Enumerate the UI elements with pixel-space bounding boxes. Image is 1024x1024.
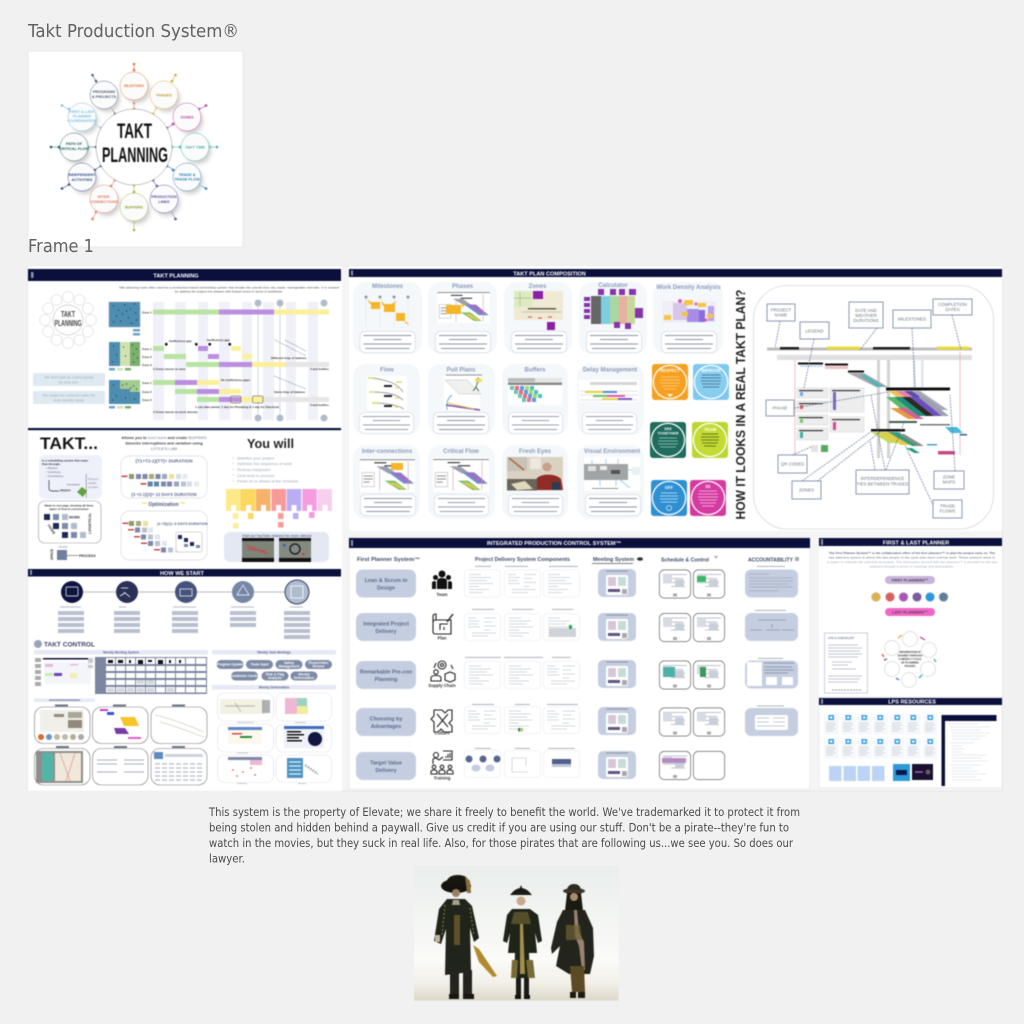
frame 1 board	[28, 266, 1002, 791]
hero card: takt planning wheel	[28, 51, 243, 247]
callout: date and weather durations: WEATHER	[855, 313, 877, 318]
gantt labels: Zone 2	[142, 355, 152, 359]
column headings: ACCOUNTABILITY	[748, 558, 794, 564]
card: three types of flow: Made in one page showing all three	[45, 504, 94, 508]
meeting chips: Program Update	[217, 663, 243, 667]
badge: 5s	[690, 480, 726, 516]
wheel nodes: COORDINATION	[67, 119, 97, 123]
colored takt blocks	[226, 489, 332, 528]
panel: takt plan composition	[349, 266, 1002, 531]
first and last description: to paper to maintain the schedule accurately. The information derived with key planners™ is provided by the last	[827, 560, 997, 564]
header: integrated production control system	[349, 538, 810, 548]
gantt labels: Inefficiency gap	[169, 339, 192, 343]
header: first and last planner	[819, 538, 1002, 546]
band labels: Weekly Task Meetings	[257, 650, 291, 654]
youtube box	[224, 532, 329, 562]
header: takt plan composition: TAKT PLAN COMPOSITION	[513, 271, 586, 277]
work density graphic	[662, 299, 716, 323]
meeting chips	[216, 660, 332, 680]
wheel nodes: PLANNER	[73, 114, 91, 118]
header: takt planning: TAKT PLANNING	[153, 274, 199, 280]
delay management graphic	[579, 380, 639, 402]
header: first and last planner: FIRST & LAST PLANNER	[883, 540, 949, 546]
card: optimized duration: (3 +5)(1)= 8 DAYS DURATION	[157, 522, 208, 526]
callout: date and weather durations	[849, 302, 883, 328]
gantt labels: Zone 3	[142, 363, 152, 367]
card: scheduling system: • Consistency	[46, 474, 64, 478]
card: scheduling system: stability	[88, 481, 97, 485]
meeting table	[95, 657, 207, 694]
band labels	[49, 650, 291, 701]
lps wheel: SHARED THROUGH	[898, 654, 923, 658]
tile titles	[362, 283, 721, 455]
band labels: Weekly Meeting System	[103, 650, 139, 654]
badge: team: TEAM	[704, 427, 716, 432]
callout: phase: PHASE	[773, 406, 788, 410]
column headings: Project Delivery System Components	[475, 557, 570, 563]
first planner pills: Planning	[375, 677, 397, 683]
badge: respect: RESPECT	[660, 368, 680, 373]
tile titles: Phases	[452, 284, 474, 290]
legend: process: PROCESS	[79, 554, 96, 558]
header: takt planning	[28, 269, 341, 281]
text: levels work: Absorbs interruptions and variation using	[125, 440, 203, 446]
gantt labels: 4 and buffers	[310, 367, 329, 371]
badge: see together: SEE	[664, 427, 672, 431]
zones graphic	[514, 291, 563, 330]
callout: milestones: MILESTONES	[898, 316, 926, 322]
card: scheduling system: of trades	[88, 485, 99, 489]
lps checklist: LPS 6 CHECKLIST	[828, 636, 855, 640]
callout: zone maps: MAPS	[943, 480, 955, 484]
small takt wheel	[40, 292, 96, 348]
tile titles: Inter-connections	[362, 449, 413, 455]
gantt bars	[153, 310, 329, 403]
panel: how we start	[28, 565, 342, 791]
zone maps	[109, 302, 140, 408]
card: duration formula	[121, 456, 207, 498]
gantt labels: 4 and buffers	[310, 403, 329, 407]
callout: completion dates: COMPLETION	[938, 302, 967, 307]
gantt labels: Zone 1	[142, 347, 152, 351]
schedule and control cards	[659, 570, 725, 780]
first planner pills: Lean & Scrum in	[365, 578, 407, 584]
wheel nodes: INDEPENDENT	[68, 173, 96, 177]
zone callouts: We shape our zones to make the	[43, 394, 95, 398]
wheel nodes	[50, 63, 218, 231]
vertical heading: HOW IT LOOKS IN A REAL TAKT PLAN?	[733, 289, 748, 520]
first and last description: The First Planner System™ is the collaborative effort of the first planners™ to plan the project early on. The	[829, 551, 995, 555]
footer disclaimer: lawyer.	[209, 852, 245, 866]
header: integrated production control system: INTEGRATED PRODUCTION CONTROL SYSTEM™	[487, 541, 621, 547]
callout: zone maps	[934, 471, 964, 489]
callout: project name: PROJECT	[771, 308, 792, 312]
panel: takt explained	[28, 428, 342, 565]
badge: 5s: 5S	[705, 484, 711, 489]
card: scheduling system: Reduces	[88, 477, 99, 481]
footer disclaimer: watch in the movies, but they suck in real life. Also, for those pirates that are following us...we see you. So does our	[209, 836, 793, 850]
wheel nodes: PHASES	[156, 94, 172, 98]
wheel nodes: & PROJECTS	[92, 95, 117, 99]
heading: takt control	[34, 640, 95, 648]
card: scheduling system: flow through:	[42, 462, 60, 466]
pirate right	[551, 884, 594, 998]
takt columns	[153, 302, 318, 420]
wheel centre circle: PLANNING	[102, 144, 168, 167]
icon: training: Training	[434, 776, 451, 780]
icon: supply chain: Supply Chain	[428, 683, 456, 688]
column headings: Schedule & Control	[661, 558, 710, 564]
card: optimized duration	[121, 511, 208, 560]
small takt wheel: TAKT	[61, 310, 75, 319]
callout: zone maps: ZONE	[943, 474, 955, 480]
callout: trade flows: FLOWS	[940, 508, 955, 514]
tile titles: Flow	[380, 368, 394, 374]
badge: see together	[650, 422, 686, 458]
footer disclaimer	[208, 805, 800, 866]
process steps	[58, 580, 310, 639]
column headings: First Planner System™	[357, 557, 420, 563]
callout: trade flows: TRADE	[940, 504, 955, 508]
first and last description	[827, 551, 997, 568]
list: outcomes	[232, 456, 299, 484]
callout: qr codes: QR CODES	[781, 462, 804, 466]
wheel nodes: LINES	[158, 200, 170, 204]
first planner pills: Design	[377, 586, 395, 592]
badge: see together: TOGETHER	[657, 432, 679, 436]
first and last description: planners through a series of meetings and deliverables.	[870, 564, 954, 568]
inter-connections graphic	[360, 458, 415, 492]
intro text: by splitting the project into phases with limited zones in terms of workflows.	[175, 290, 283, 294]
wheel nodes: INTER-	[98, 195, 111, 199]
title: Takt Production System®	[27, 21, 239, 42]
tile titles: Calculator	[598, 283, 628, 289]
icon: supply chain	[428, 661, 456, 688]
tile text boxes	[359, 331, 717, 516]
wheel nodes: TAKT TIME	[185, 146, 205, 150]
critical flow graphic	[433, 458, 489, 492]
badge: respect	[652, 364, 688, 400]
meeting chips: Analysis	[268, 676, 282, 680]
list: outcomes: Finish on or ahead of the schedule	[237, 478, 299, 484]
card: three types of flow: types of flow in construction	[49, 507, 89, 511]
footer disclaimer: being stolen and hidden behind a paywall. Give us credit if you are using our stuff. Don't be a pirate--they're fun to	[209, 820, 789, 834]
frame label: Frame 1	[28, 236, 94, 257]
wheel nodes: ZONES	[180, 116, 194, 120]
intro text: Takt planning most often used by a production-based scheduling system that breaks the overall time into equal, manageable intervals. It is created	[119, 286, 339, 290]
zone callouts: by area size.	[59, 380, 79, 384]
gantt labels: No inefficiency gaps	[221, 378, 251, 382]
badge: off: OFF	[665, 485, 674, 490]
delivery component documents	[464, 566, 580, 777]
wheel nodes: ACTIVITIES	[72, 178, 93, 182]
meeting chips: Management	[279, 664, 300, 668]
first planner pills	[356, 570, 416, 780]
list: outcomes: Limit work in process	[237, 473, 274, 478]
callout: interdependence	[856, 470, 909, 494]
annotated takt plan	[754, 286, 994, 529]
principle badges	[650, 364, 729, 516]
blue resource tiles	[829, 766, 884, 781]
small takt wheel: PLANNING	[54, 319, 82, 328]
first planner pills: Advantages	[371, 724, 401, 730]
callout: zones	[792, 481, 821, 499]
panel: takt planning	[28, 266, 342, 429]
zone callouts: We don't split up zones equally	[44, 376, 94, 380]
deliverable cards	[218, 693, 332, 784]
lps wheel: INFORMATION IS	[899, 650, 921, 654]
badge: improve	[693, 364, 729, 400]
tile titles: Pull Plans	[447, 368, 476, 374]
first planner pills: Target Value	[370, 760, 402, 766]
card: duration formula: (3 +2-1)(3)= 12 DAYS DURATION	[131, 492, 197, 497]
badge: off	[651, 480, 687, 516]
tile titles: Buffers	[524, 368, 546, 374]
fresh eyes photo	[507, 457, 563, 490]
pirate centre	[503, 885, 542, 999]
card: scheduling system: PROFIT	[60, 488, 71, 492]
meeting chips: Weekly	[298, 672, 310, 676]
callout: phase	[766, 400, 794, 416]
card: scheduling system: • Continuity	[46, 470, 61, 474]
lps wheel: OF PLANNING	[901, 660, 919, 664]
buffers graphic	[508, 378, 562, 405]
meeting chips: Trade Input	[250, 663, 270, 667]
section bands	[34, 650, 336, 702]
panel: integrated production control system	[349, 537, 810, 789]
pirate left	[434, 875, 497, 999]
tile titles: Work Density Analysis	[656, 285, 721, 291]
list: outcomes: Stabilize your project	[237, 456, 275, 460]
column markers	[254, 300, 328, 422]
resource contents page	[942, 715, 996, 786]
column headings	[357, 556, 799, 564]
card: scheduling system	[39, 455, 102, 499]
panel: first and last planner	[819, 537, 1002, 697]
tile titles: Visual Environment	[584, 449, 640, 455]
icon: team	[432, 570, 452, 597]
callout: project name: NAME	[775, 312, 787, 318]
icon: plan: Plan	[437, 636, 447, 640]
photo: three pirates	[414, 866, 618, 1000]
milestones graphic	[364, 296, 410, 327]
planner circles	[871, 592, 948, 602]
gantt labels: 3 Zones based on area	[153, 367, 186, 371]
first planner pills: Remarkable Pre-con	[360, 670, 412, 676]
tile titles: Milestones	[372, 284, 404, 290]
tile titles: Fresh Eyes	[519, 449, 552, 455]
callout: interdependence: TIES BETWEEN TRADES	[857, 482, 908, 486]
column headings: Meeting System	[593, 557, 635, 563]
first and last description: last planners system is where the last people in the cycle plan short interval work. These systems show to	[829, 556, 995, 560]
gantt labels: Same Amp of balance	[274, 390, 305, 394]
gantt labels: Zone 3	[142, 398, 152, 402]
pill: first planners: FIRST PLANNERS™	[892, 578, 929, 582]
wheel nodes: TRADE FLOW	[174, 178, 200, 182]
callout: legend	[800, 322, 829, 339]
heading: takt: TAKT...	[40, 434, 98, 453]
wheel nodes: PROGRAMS	[93, 90, 116, 94]
callout leader lines	[775, 315, 961, 505]
badge: team	[692, 422, 728, 458]
tile backgrounds	[353, 282, 723, 519]
legend: process: SPACE	[50, 548, 54, 560]
intro text	[119, 286, 339, 294]
accountability cards	[745, 566, 798, 736]
meeting chips: Deliverables	[294, 676, 314, 680]
gantt labels: Zone 2	[142, 390, 152, 394]
header: how we start: HOW WE START	[160, 571, 205, 577]
callout: legend: LEGEND	[805, 328, 824, 334]
meeting chips: Risk & Flag	[266, 672, 284, 676]
card: scheduling system: • Rhythm	[46, 466, 58, 470]
lps wheel: PHASES	[905, 664, 916, 668]
tile titles: Critical Flow	[443, 449, 479, 455]
wheel nodes: PRODUCTION	[151, 195, 177, 199]
header: takt plan composition	[349, 269, 1002, 277]
text: levels work	[121, 435, 207, 451]
zone callouts: work density equal.	[54, 398, 84, 402]
header: lps resources	[819, 698, 1002, 706]
gantt labels: Zone 1	[142, 310, 152, 314]
callout: milestones	[893, 310, 931, 328]
label: optimization: Optimization	[148, 502, 179, 508]
control cards	[34, 704, 207, 785]
icon: plan	[433, 614, 453, 640]
gantt labels: Inefficiency gap	[207, 338, 230, 342]
meeting system cards	[598, 569, 636, 779]
pill: first planners	[885, 576, 935, 584]
meeting chips: Photo/Video	[309, 661, 328, 665]
meeting chips: Review	[313, 664, 325, 668]
lps checklist	[824, 633, 868, 693]
wheel nodes: CONNECTIONS	[90, 200, 118, 204]
list: outcomes: Reduce manpower	[237, 467, 271, 472]
resource video thumbnails	[893, 764, 933, 781]
panel: lps resources	[819, 697, 1002, 788]
pull plans graphic	[444, 375, 482, 410]
gantt labels: Zone 1	[142, 381, 152, 385]
zone callouts	[33, 373, 105, 404]
list: outcomes: Optimize the sequence of work	[237, 461, 292, 466]
card: three types of flow: WORK	[69, 516, 81, 520]
callout: zones: ZONES	[799, 488, 814, 492]
icon: culture	[431, 710, 452, 736]
wheel nodes: PATH OF	[66, 142, 83, 146]
wheel nodes: BUFFERS	[125, 206, 143, 210]
callout: trade flows	[933, 500, 962, 518]
gantt labels: Different Amp of balance	[271, 356, 307, 360]
visual environment graphic	[584, 457, 640, 491]
first planner pills: Delivery	[376, 629, 396, 635]
callout: qr codes	[778, 455, 807, 473]
youtube box: Visit our YouTube channel for more videos!	[242, 534, 312, 538]
meeting chips: Roadblock Control	[229, 674, 260, 678]
first planner pills: Integrated Project	[363, 622, 409, 628]
wheel nodes: CRITICAL FLOW	[59, 147, 89, 151]
icon: training	[431, 751, 453, 780]
card: scheduling system: Is a scheduling system that maps	[42, 458, 88, 462]
tile titles: Zones	[529, 284, 547, 290]
legend: process	[50, 545, 96, 560]
gantt labels	[142, 310, 329, 414]
pill: last planners: LAST PLANNERS™	[892, 610, 928, 614]
first planner pills: Delivery	[376, 768, 396, 774]
mini plan	[35, 658, 93, 686]
flow graphic	[367, 376, 407, 410]
wheel centre circle: TAKT	[117, 120, 152, 143]
card: duration formula: (T1+T2-1)(TT)= DURATION	[135, 458, 193, 464]
gantt labels: 3 Zones based on work density	[153, 410, 198, 414]
callout: date and weather durations: DURATIONS	[853, 318, 879, 323]
callout: interdependence: INTERDEPENDENCE	[861, 476, 904, 481]
pill: last planners	[885, 608, 935, 616]
badge: improve: IMPROVE	[701, 368, 721, 373]
callout: completion dates	[933, 299, 972, 315]
calculator graphic	[584, 289, 643, 329]
callout: project name	[767, 304, 795, 321]
card: three types of flow: TRADE	[46, 523, 57, 536]
callout: date and weather durations: DATE AND	[855, 308, 877, 313]
header: how we start	[28, 569, 341, 577]
card: scheduling system: Increased	[67, 482, 80, 486]
wheel nodes: MILESTONES	[124, 84, 144, 88]
meeting chips: Safety	[284, 661, 294, 665]
wheel centre circle	[96, 109, 172, 185]
band labels: Weekly Deliverables	[259, 686, 290, 690]
heading: takt control: TAKT CONTROL	[44, 642, 95, 648]
icon: culture: Culture	[434, 730, 450, 736]
lps wheel	[882, 632, 936, 688]
legend: process: TRADE	[58, 545, 68, 549]
phases graphic	[437, 291, 490, 323]
gantt labels: 1 sub take partial: 1 day for Plumbing & 1 day for Electrical	[195, 405, 279, 409]
heading: you will: You will	[247, 436, 294, 451]
tile titles: Delay Management	[583, 368, 637, 374]
text: levels work: Allows you to level work and create BUFFERS	[121, 435, 207, 440]
plan chart	[767, 346, 972, 458]
lps wheel: A WEEKLY CYCLE	[899, 657, 922, 661]
footer disclaimer: This system is the property of Elevate; we share it freely to benefit the world. We've trademarked it to protect it from	[208, 805, 800, 819]
wheel nodes: FIRST & LAST	[69, 110, 96, 114]
wheel nodes: TRADE &	[179, 173, 196, 177]
resource documents	[824, 714, 938, 759]
card: three types of flow: LOGISTICAL	[88, 512, 92, 534]
first planner pills: Choosing by	[370, 716, 402, 722]
header: lps resources: LPS RESOURCES	[888, 700, 936, 706]
callout: completion dates: DATES	[945, 307, 960, 312]
card: three types of flow	[38, 501, 101, 543]
text: levels work: LITTLE'S LAW	[151, 446, 178, 451]
icon: team: Team	[437, 592, 448, 597]
